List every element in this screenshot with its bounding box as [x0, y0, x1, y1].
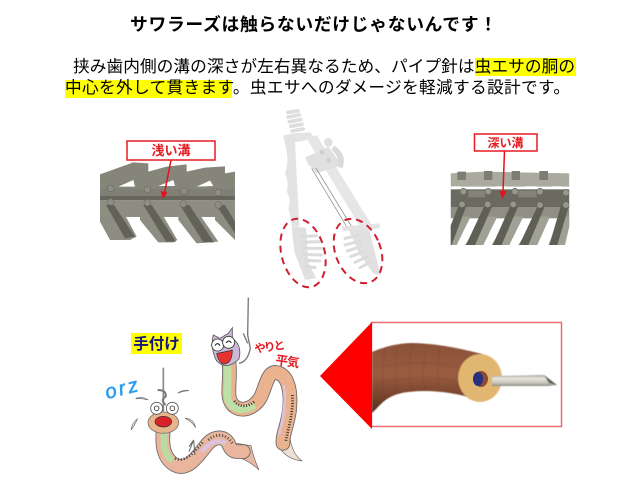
panel: deep groove render	[450, 171, 570, 245]
eyes	[151, 402, 163, 414]
green belly	[164, 432, 172, 461]
hook barb	[189, 440, 195, 455]
label: shallow groove: 浅い溝	[151, 143, 191, 158]
pipe needle	[492, 375, 557, 386]
illustration: happy worm	[212, 298, 302, 461]
label: deep groove	[474, 134, 537, 151]
body	[228, 358, 290, 443]
highlight: first line	[475, 58, 576, 76]
arrow: deep groove pointer	[500, 151, 506, 199]
panel: needle through worm cross-section	[372, 322, 562, 426]
left jaw	[292, 227, 316, 280]
pipe needle bore	[473, 372, 483, 386]
highlight ellipse: left jaw	[273, 214, 333, 292]
label: shallow groove	[127, 141, 215, 160]
worm texture	[376, 344, 462, 398]
handwritten label: red remark line 2: 平気	[275, 352, 301, 370]
hatching	[175, 435, 232, 460]
head	[212, 328, 240, 366]
eyes	[212, 339, 224, 351]
explanation line 1: 挟み歯内側の溝の深さが左右異なるため、パイプ針は虫エサの胴の	[73, 57, 575, 76]
hatching	[234, 395, 293, 442]
highlight ellipse: right jaw	[325, 212, 391, 290]
sweat marks	[131, 390, 196, 430]
callout box	[372, 322, 562, 426]
label: hand threading: 手付け	[133, 334, 180, 353]
arrow: shallow groove pointer	[160, 160, 171, 199]
fishing line and hook	[239, 298, 250, 363]
highlight: second line	[65, 80, 232, 98]
panel: shallow groove render	[100, 162, 235, 243]
title: サワラーズは触らないだけじゃないんです！	[130, 14, 497, 34]
text block: explanation	[65, 57, 576, 98]
explanation line 2: 中心を外して貫きます。虫エサへのダメージを軽減する設計です。	[65, 78, 570, 97]
tail	[277, 435, 302, 461]
head	[148, 412, 179, 433]
right jaw	[348, 227, 381, 275]
illustration: sawara tongs	[283, 111, 381, 280]
worm body	[372, 343, 482, 413]
right arm	[307, 135, 372, 227]
label: deep groove: 深い溝	[487, 135, 524, 150]
body	[163, 430, 243, 467]
handwritten label: orz: orz	[103, 375, 140, 404]
mouth	[155, 416, 172, 427]
handwritten label: red remark line 1: やりと	[254, 339, 286, 356]
needle wires	[312, 168, 352, 228]
tail	[237, 443, 259, 470]
green belly	[227, 362, 254, 409]
illustration: sad worm	[131, 368, 259, 470]
worm hole	[474, 371, 488, 387]
spring handle	[288, 111, 303, 131]
fishing line and knot	[161, 368, 166, 417]
left arm	[283, 132, 315, 227]
worm cut end	[458, 354, 502, 402]
arrow: red pointer triangle	[320, 322, 372, 429]
cross block	[305, 147, 342, 173]
